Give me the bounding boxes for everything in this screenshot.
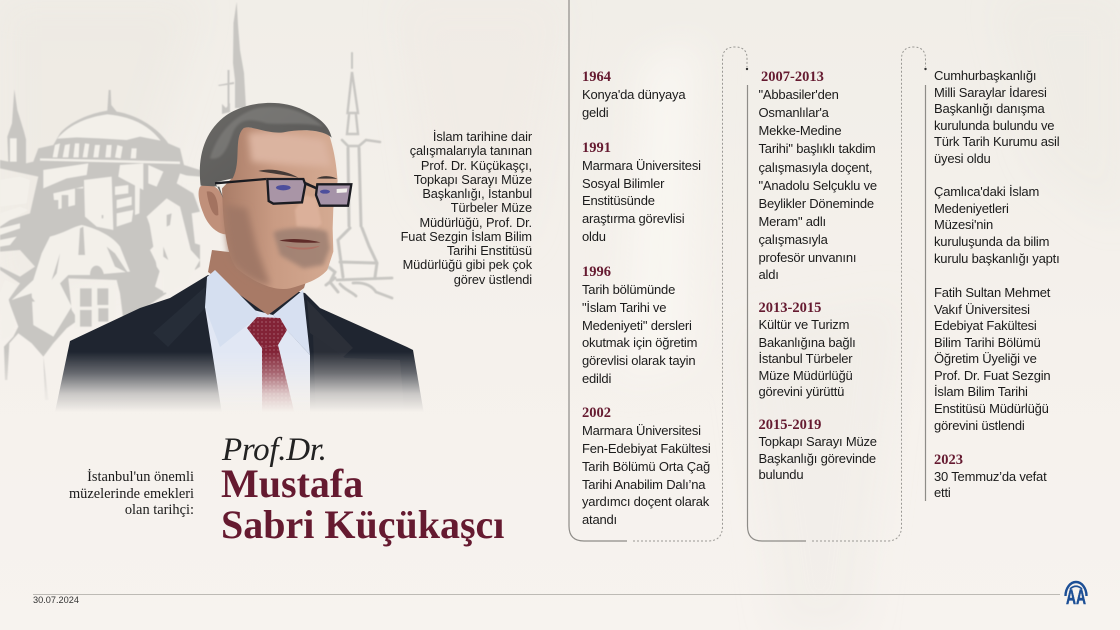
text: "Abbasiler'den: [758, 86, 839, 102]
intro text: Türbeler Müze: [451, 200, 532, 215]
ear: [199, 184, 226, 234]
text: Osmanlılar'a: [758, 104, 829, 120]
text: Fatih Sultan Mehmet: [934, 285, 1050, 300]
mosque body: [0, 89, 200, 400]
text: Prof. Dr. Fuat Sezgin: [934, 368, 1050, 383]
face: [222, 127, 338, 289]
text: Medeniyetleri: [934, 201, 1009, 216]
text: kuruluşunda da bilim: [934, 234, 1049, 249]
text: 2023: [934, 452, 963, 468]
shirt: [205, 307, 310, 408]
intro text: İslam tarihine dair: [433, 129, 532, 144]
title: [221, 432, 504, 547]
subtitle: Prof.Dr.: Prof.Dr.: [222, 432, 327, 468]
left caption: İstanbul'un önemli: [87, 469, 194, 485]
text: görevlisi olarak tayin: [582, 352, 695, 368]
date: 30.07.2024: [33, 595, 79, 605]
text: Vakıf Üniversitesi: [934, 302, 1030, 317]
text: Müze Müdürlüğü: [758, 368, 853, 382]
neck: [208, 250, 312, 315]
text: 1964: [582, 69, 611, 85]
text: Milli Saraylar İdaresi: [934, 85, 1047, 100]
text: Kültür ve Turizm: [758, 317, 849, 332]
glasses: [215, 179, 351, 206]
text: 2007-2013: [761, 69, 824, 85]
text: 1991: [582, 140, 611, 156]
text: etti: [934, 485, 951, 500]
column 3: later duties and 2023: [934, 68, 1059, 500]
footer rule: [33, 594, 1060, 595]
hair: [200, 103, 332, 198]
text: 30 Temmuz’da vefat: [934, 469, 1046, 484]
logo: AA: [1064, 580, 1088, 607]
text: Bakanlığına bağlı: [758, 334, 856, 350]
text: 2002: [582, 405, 611, 421]
column 2: 2007-2019: [758, 69, 877, 482]
head: [199, 103, 351, 289]
text: görevini yürüttü: [758, 384, 844, 399]
text: 2015-2019: [758, 417, 821, 433]
text: görevini üstlendi: [934, 418, 1025, 433]
name: Sabri Küçükaşcı: [221, 502, 504, 547]
text: 2013-2015: [758, 300, 821, 316]
text: Bilim Tarihi Bölümü: [934, 335, 1040, 350]
text: profesör unvanını: [758, 250, 856, 264]
intro text: Müdürlüğü gibi pek çok: [403, 257, 532, 272]
text: Marmara Üniversitesi: [582, 158, 701, 172]
intro text: görev üstlendi: [454, 272, 532, 286]
text: araştırma görevlisi: [582, 210, 684, 226]
text: yardımcı doçent olarak: [582, 494, 709, 508]
left caption: müzelerinde emekleri: [69, 486, 194, 502]
text: çalışmasıyla doçent,: [758, 160, 872, 174]
text: 1996: [582, 264, 611, 280]
text: kurulu başkanlığı yaptı: [934, 251, 1059, 266]
illustration: Hagia Sophia sketch and portrait: [0, 4, 423, 408]
text: atandı: [582, 512, 617, 526]
text: edildi: [582, 370, 611, 386]
intro text: Topkapı Sarayı Müze: [414, 172, 532, 187]
portrait: Prof. Dr. Mustafa Sabri Küçükaşcı: [55, 103, 425, 420]
tie: [247, 317, 287, 348]
text: Beylikler Döneminde: [758, 196, 874, 210]
text: Tarih bölümünde: [582, 282, 675, 296]
text: Tarihi" başlıklı takdim: [758, 140, 876, 156]
text: Sosyal Bilimler: [582, 176, 664, 190]
left caption: [69, 468, 194, 518]
name: Mustafa: [221, 461, 363, 506]
text: "İslam Tarihi ve: [582, 300, 666, 314]
text: Enstitüsünde: [582, 192, 655, 208]
right minaret: [322, 53, 392, 298]
text: Çamlıca'daki İslam: [934, 184, 1039, 199]
intro text: Tarihi Enstitüsü: [447, 243, 532, 258]
text: Konya'da dünyaya: [582, 86, 685, 102]
intro text: çalışmalarıyla tanınan: [410, 143, 532, 158]
text: çalışmasıyla: [758, 232, 828, 246]
text: bulundu: [758, 467, 803, 482]
text: Başkanlığı görevinde: [758, 451, 876, 466]
text: Topkapı Sarayı Müze: [758, 434, 877, 449]
text: Edebiyat Fakültesi: [934, 318, 1037, 333]
text: Öğretim Üyeliği ve: [934, 351, 1037, 366]
jacket: [55, 275, 425, 420]
text: "Anadolu Selçuklu ve: [758, 178, 877, 192]
text: Müzesi'nin: [934, 217, 993, 232]
text: okutmak için öğretim: [582, 334, 697, 350]
text: oldu: [582, 228, 606, 244]
text: Medeniyeti" dersleri: [582, 318, 692, 332]
text: İslam Bilim Tarihi: [934, 384, 1028, 399]
text: aldı: [758, 266, 779, 282]
text: Enstitüsü Müdürlüğü: [934, 401, 1049, 416]
text: Fen-Edebiyat Fakültesi: [582, 440, 711, 456]
central minaret: [218, 2, 246, 114]
intro text: Prof. Dr. Küçükaşçı,: [421, 158, 532, 172]
text: Tarih Bölümü Orta Çağ: [582, 458, 710, 474]
intro text: Fuat Sezgin İslam Bilim: [401, 229, 532, 244]
intro text: Müdürlüğü, Prof. Dr.: [419, 214, 532, 230]
text: Başkanlığı danışma: [934, 101, 1045, 116]
column 1: 1964-2002: [582, 69, 711, 526]
text: İstanbul Türbeler: [758, 351, 852, 366]
text: Mekke-Medine: [758, 122, 841, 138]
text: Cumhurbaşkanlığı: [934, 68, 1036, 83]
text: Türk Tarih Kurumu asil: [934, 134, 1059, 149]
intro text: Başkanlığı, İstanbul: [422, 186, 532, 201]
shirt collar: [205, 270, 260, 347]
text: Meram" adlı: [758, 214, 826, 228]
text: geldi: [582, 104, 608, 120]
left caption: olan tarihçi:: [125, 502, 194, 518]
illustration: mosque sketch: [0, 2, 392, 400]
intro text: [401, 129, 532, 286]
text: Marmara Üniversitesi: [582, 422, 701, 438]
text: üyesi oldu: [934, 151, 991, 166]
text: kurulunda bulundu ve: [934, 118, 1054, 133]
name: [221, 461, 504, 547]
text: Tarihi Anabilim Dalı’na: [582, 476, 705, 492]
